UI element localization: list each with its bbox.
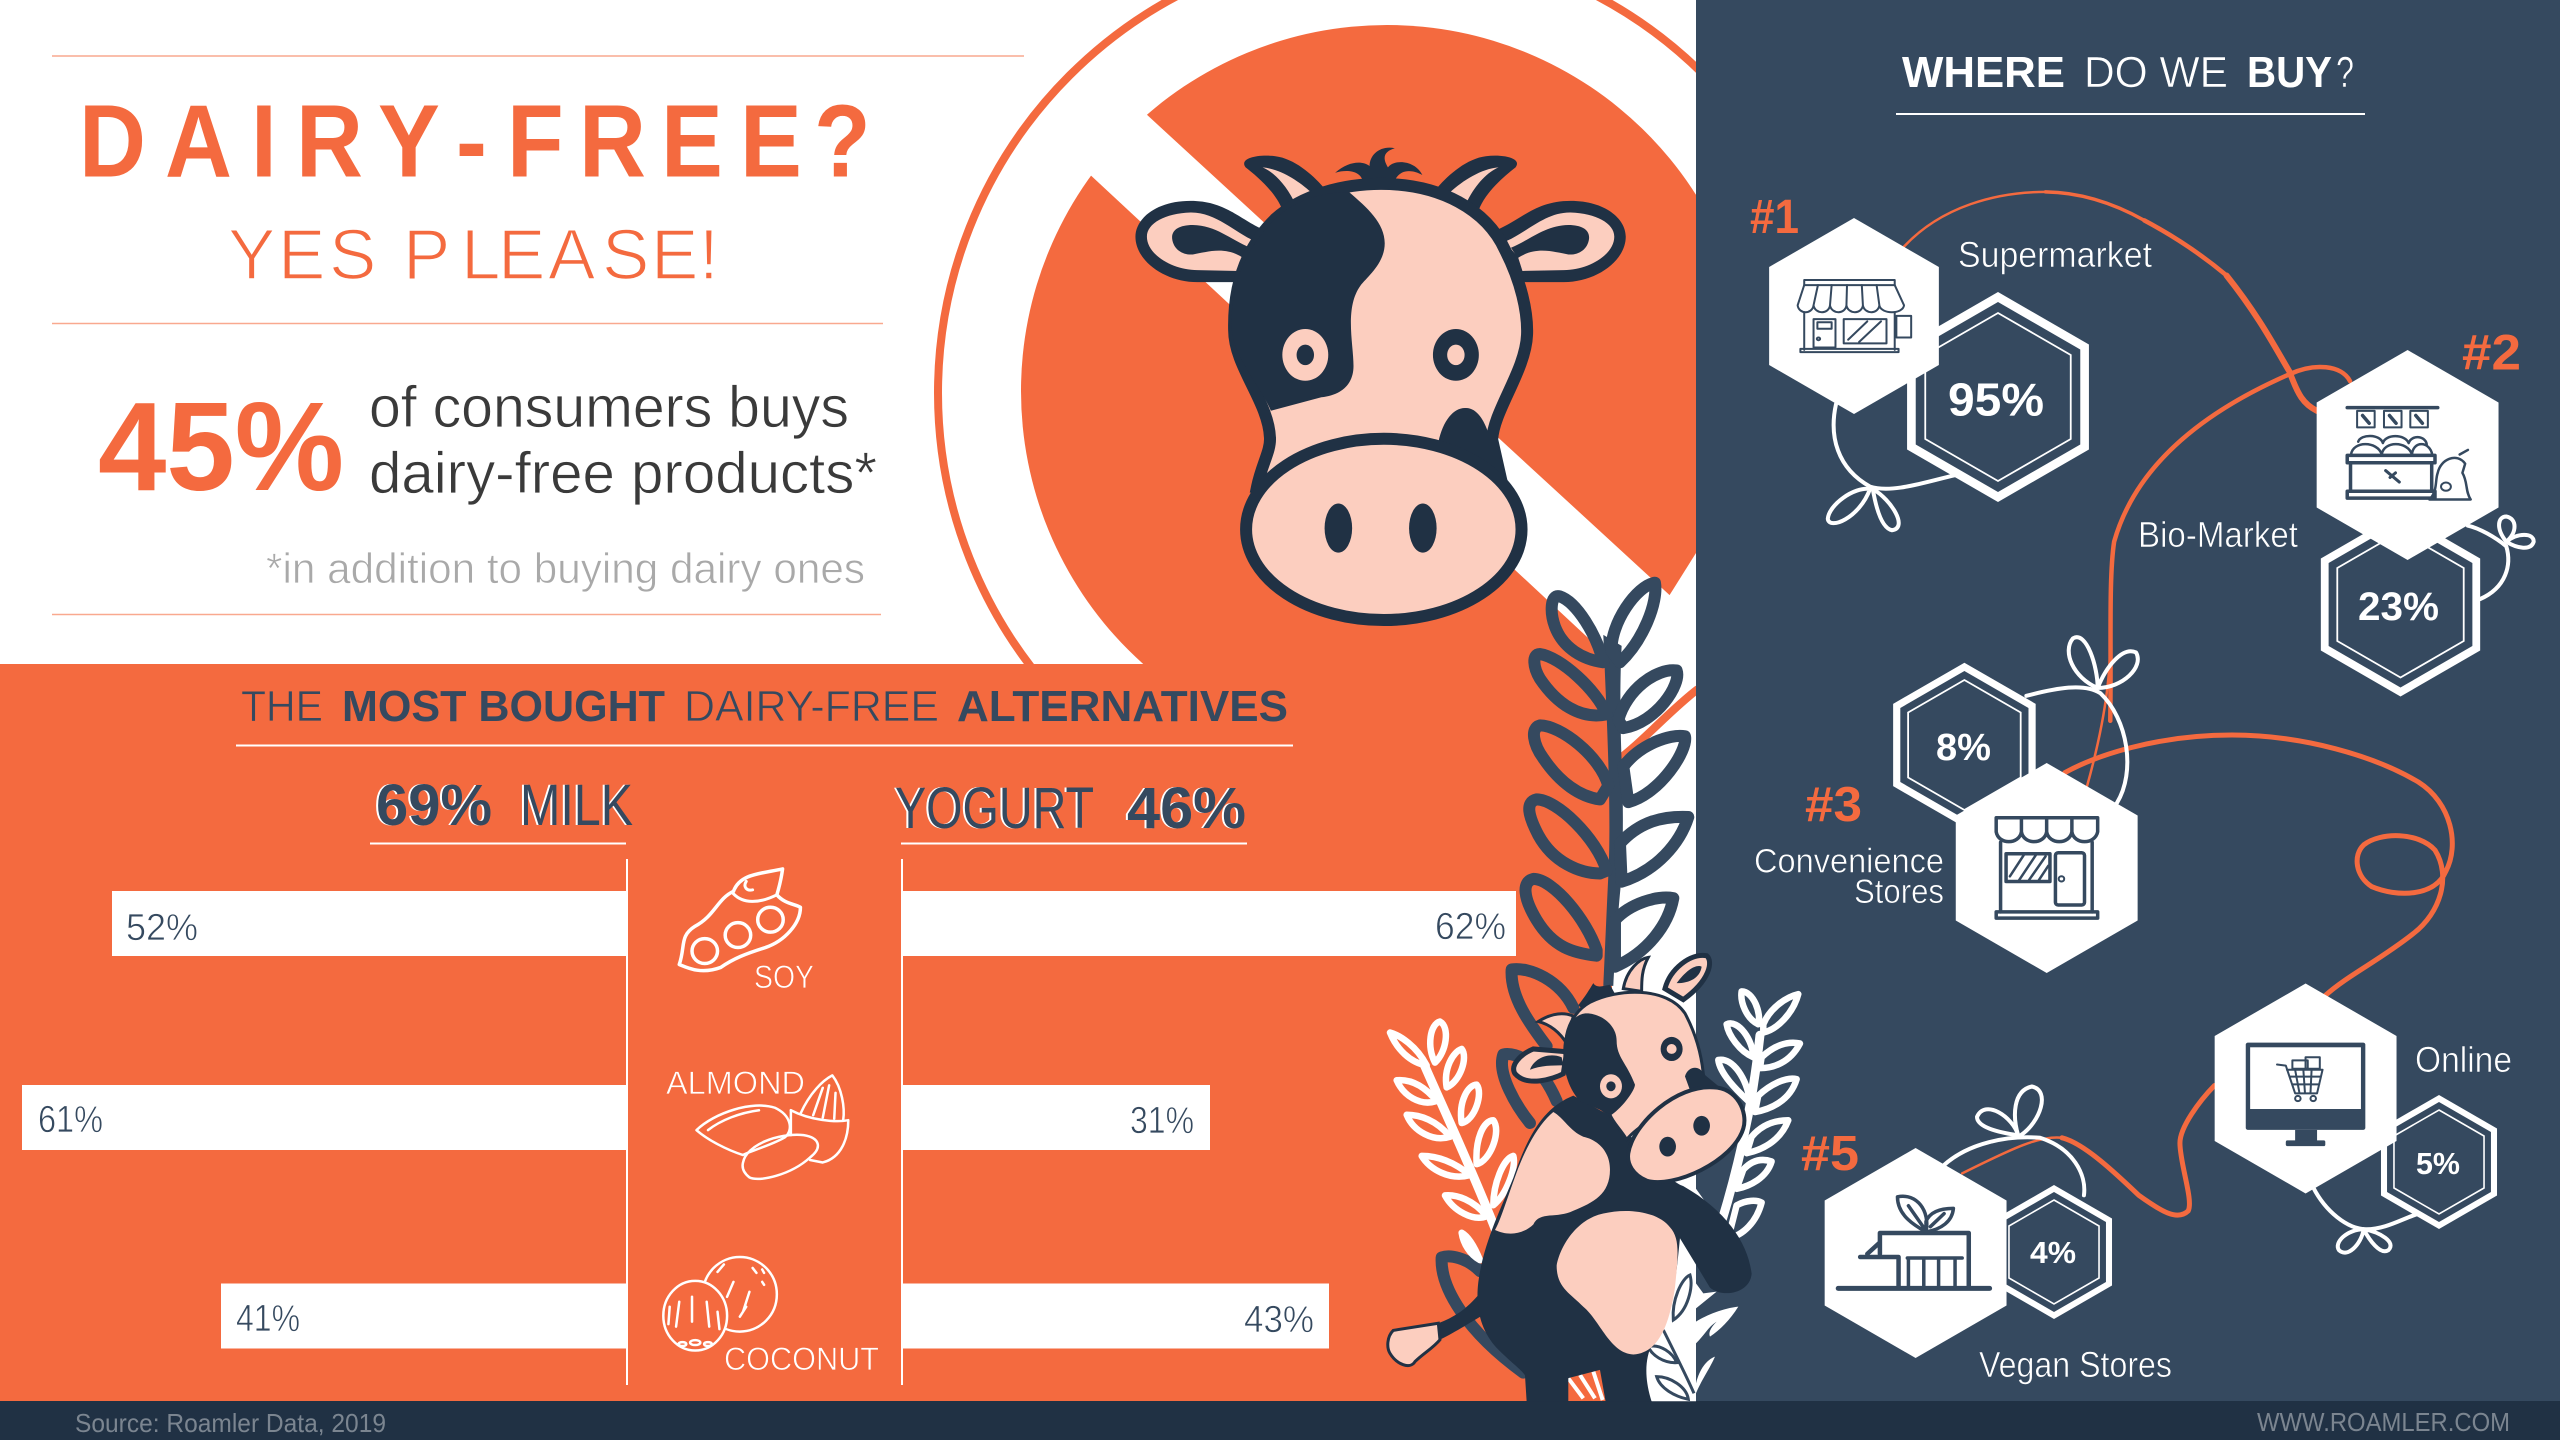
- label supermarket: Supermarket: [1958, 234, 2152, 275]
- column heading: milk: MILK: [520, 773, 633, 838]
- milk bar coconut: [221, 1284, 627, 1348]
- icon: almond: ALMOND: [666, 1065, 805, 1101]
- footer source: Source: Roamler Data, 2019: [75, 1408, 386, 1438]
- white ribbon connectors: [1828, 404, 2534, 1253]
- yogurt bar soy: 62%: [1435, 906, 1506, 948]
- badge 4 percent: 4%: [2030, 1235, 2076, 1270]
- statistic: 45 percent: [98, 375, 877, 517]
- subtitle: YES PLEASE!: [228, 216, 719, 295]
- badge 23 percent: [2321, 512, 2480, 696]
- heading: where do we buy: WHERE: [1902, 48, 2065, 97]
- milk bar coconut: 41%: [236, 1298, 300, 1340]
- hexagon with vegan store icon: [1825, 1148, 2007, 1358]
- label vegan stores: Vegan Stores: [1979, 1344, 2172, 1385]
- channel 4: online: [2215, 984, 2512, 1229]
- yogurt bar almond: 31%: [1130, 1100, 1194, 1142]
- heading: most bought alternatives: ALTERNATIVES: [957, 682, 1288, 731]
- heading: where do we buy: DO WE: [2084, 48, 2228, 97]
- heading: where do we buy: ?: [2336, 48, 2354, 97]
- ring fragment lower right: [1610, 689, 1698, 766]
- rank #3: #3: [1805, 778, 1862, 832]
- plant: white leaves right: [1718, 991, 1800, 1238]
- heading: most bought alternatives: DAIRY-FREE: [684, 682, 939, 731]
- no-entry sign behind cow: [934, 0, 1696, 664]
- badge 4 percent: [1996, 1185, 2112, 1319]
- yogurt bar coconut: 43%: [1244, 1299, 1314, 1341]
- channel 5: vegan stores: [1801, 1127, 2172, 1385]
- small cow: [1388, 955, 1752, 1402]
- milk bar almond: 61%: [38, 1099, 103, 1141]
- hexagon with supermarket icon: [1769, 218, 1939, 414]
- column heading: yogurt: 46%: [1127, 776, 1246, 841]
- plant: white leaves left: [1390, 1022, 1514, 1260]
- icon: soy: [679, 869, 814, 995]
- plant: tall navy leaves: [1442, 583, 1688, 1373]
- milk bar soy: [112, 891, 627, 956]
- heading: most bought alternatives: MOST BOUGHT: [342, 682, 665, 731]
- milk bar almond: [22, 1085, 627, 1150]
- heading: most bought alternatives: [236, 682, 1293, 746]
- panel: alternatives background: [0, 664, 1612, 1402]
- icon: coconut: COCONUT: [724, 1341, 879, 1377]
- channel 1: supermarket: [1750, 191, 2152, 502]
- column heading: milk: MILK: [518, 773, 631, 838]
- icon: coconut: [663, 1257, 879, 1377]
- badge 95 percent: 95%: [1948, 374, 2044, 426]
- column heading: milk: 69%: [374, 773, 490, 838]
- icon: almond: [666, 1065, 848, 1179]
- rank #2: #2: [2462, 325, 2521, 381]
- big cow head: [1135, 148, 1626, 620]
- badge 23 percent: 23%: [2358, 585, 2439, 629]
- badge 95 percent: [1907, 292, 2089, 502]
- heading: where do we buy: BUY: [2247, 48, 2332, 97]
- statistic: 45 percent: 45%: [98, 376, 344, 517]
- badge 8 percent: 8%: [1936, 727, 1991, 769]
- badge 5 percent: [2381, 1095, 2497, 1229]
- rank #5: #5: [1801, 1127, 1859, 1181]
- column heading: milk: 69%: [376, 773, 492, 838]
- column heading: milk: [370, 773, 633, 844]
- footnote: *in addition to buying dairy ones: [266, 545, 865, 593]
- icon: soy: SOY: [754, 959, 814, 995]
- yogurt bar soy: [902, 891, 1516, 956]
- footer bar: [0, 1401, 2560, 1440]
- panel: where do we buy background: [1696, 0, 2560, 1402]
- label convenience stores: Convenience: [1754, 843, 1944, 881]
- statistic: 45 percent: dairy-free products*: [369, 441, 877, 506]
- label online: Online: [2415, 1039, 2512, 1080]
- badge 8 percent: [1893, 663, 2036, 827]
- label convenience stores: Stores: [1854, 873, 1944, 911]
- header block: [52, 56, 1024, 614]
- label bio-market: Bio-Market: [2138, 514, 2298, 555]
- heading: most bought alternatives: THE: [241, 682, 323, 731]
- channel 2: bio-market: [2138, 325, 2521, 696]
- hexagon with online shop icon: [2215, 984, 2397, 1194]
- heading: where do we buy: [1896, 48, 2365, 114]
- badge 5 percent: 5%: [2416, 1146, 2460, 1181]
- column heading: yogurt: YOGURT: [893, 776, 1092, 841]
- channel 3: convenience stores: [1754, 663, 2138, 973]
- rank #1: #1: [1750, 191, 1799, 244]
- hexagon with market stall icon: [2317, 350, 2499, 560]
- column heading: yogurt: 46%: [1125, 776, 1244, 841]
- yogurt bar coconut: [902, 1284, 1329, 1348]
- column heading: yogurt: YOGURT: [895, 776, 1094, 841]
- orange connector curves: [1904, 192, 2452, 1215]
- title: DAIRY-FREE?: [79, 83, 871, 199]
- milk bar soy: 52%: [126, 907, 198, 949]
- label convenience stores: [1754, 843, 1944, 911]
- footer website: WWW.ROAMLER.COM: [2257, 1407, 2510, 1437]
- column heading: yogurt: [893, 776, 1247, 844]
- statistic: 45 percent: of consumers buys: [369, 375, 849, 440]
- yogurt bar almond: [902, 1085, 1210, 1150]
- hexagon with convenience store icon: [1956, 763, 2138, 973]
- bar chart: [22, 859, 1516, 1385]
- plant: leaves behind cow at bottom: [1568, 1185, 1738, 1401]
